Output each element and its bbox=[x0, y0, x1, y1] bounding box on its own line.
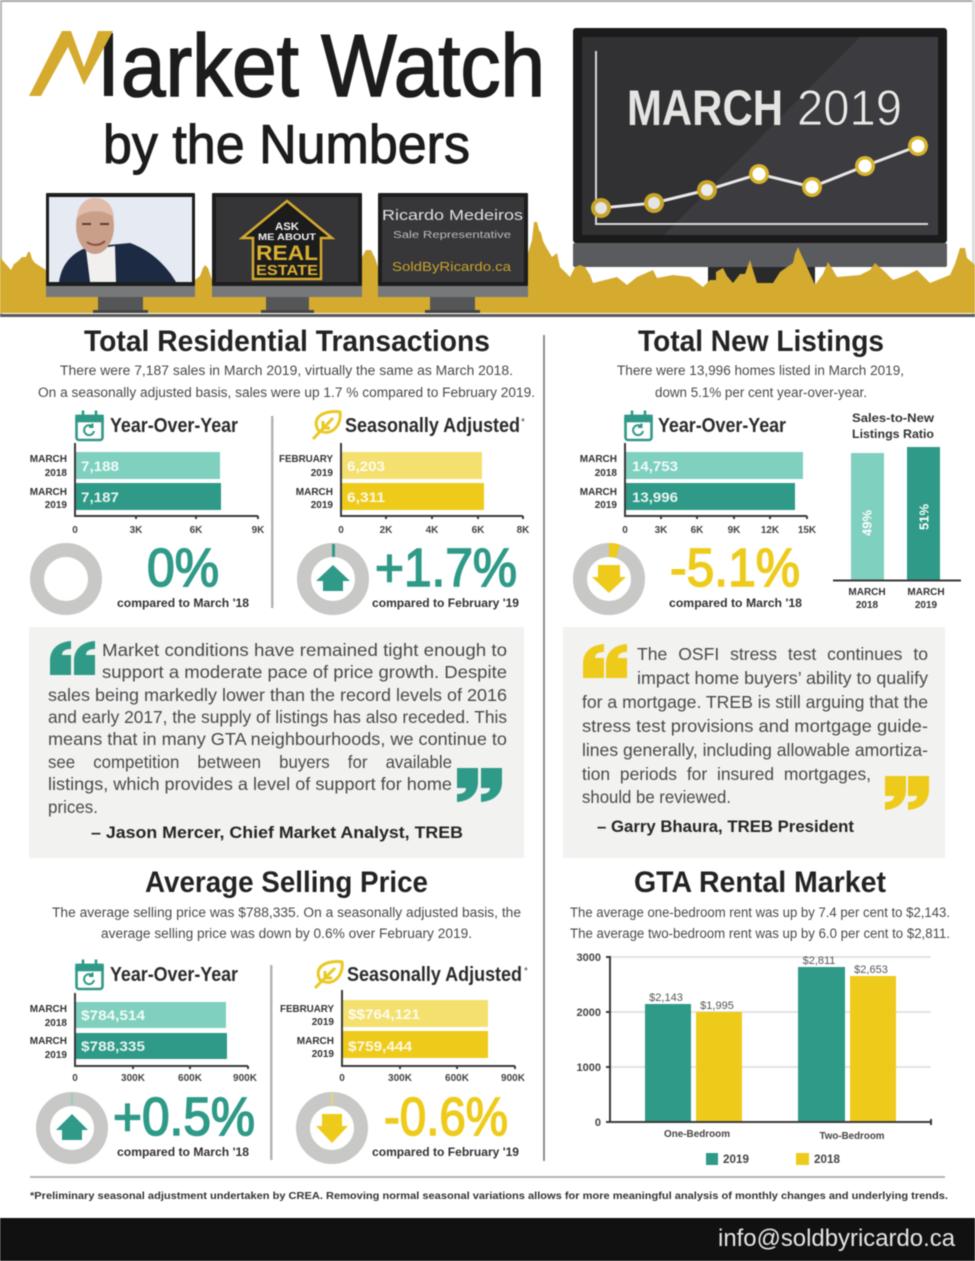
heading: GTA rental market: GTA Rental Market bbox=[634, 866, 886, 899]
month label: 2019 bbox=[797, 80, 902, 136]
icon: leaf bbox=[315, 962, 342, 988]
donut: down 5.1 percent bbox=[580, 550, 638, 608]
bar chart: rental market bbox=[577, 952, 931, 1166]
text block: listings summary bbox=[617, 363, 904, 400]
heading: total residential transactions: Total Residential Transactions bbox=[84, 325, 490, 358]
panel: Garry Bhaura quote: stress test provisions and mortgage guide- bbox=[582, 716, 928, 736]
bar chart: price seasonally adjusted: FEBRUARY bbox=[280, 1004, 334, 1015]
legend: 2018 bbox=[814, 1154, 841, 1166]
bar chart: rental market: One-Bedroom bbox=[664, 1128, 730, 1140]
donut: up 1.7 percent bbox=[304, 544, 362, 608]
bar chart: listings year-over-year: 14,753 bbox=[632, 458, 678, 474]
bar chart: sales-to-new listings ratio: Listings Ratio bbox=[852, 427, 934, 441]
bar chart: rental market: $2,811 bbox=[803, 955, 835, 967]
monitor: agent name bbox=[378, 193, 528, 313]
stat: +1.7% compared to February 19: compared to February '19 bbox=[372, 598, 519, 610]
panel: Jason Mercer quote: see competition between buyers for available bbox=[48, 752, 452, 772]
heading with icon: year-over-year (transactions): Year-Over-Year bbox=[110, 415, 238, 437]
text block: listings summary: There were 13,996 homes listed in March 2019, bbox=[617, 363, 904, 378]
heading with icon: seasonally adjusted (transactions): Seasonally Adjusted bbox=[345, 415, 520, 437]
bar chart: sales-to-new listings ratio: 49% bbox=[860, 510, 874, 536]
bar chart: transactions seasonally adjusted: MARCH bbox=[296, 487, 333, 498]
bar chart: transactions year-over-year: 3K bbox=[130, 525, 143, 536]
heading with icon: seasonally adjusted (transactions): * bbox=[521, 417, 525, 428]
bar chart: transactions year-over-year: MARCH bbox=[30, 454, 67, 465]
title: arket Watch bbox=[121, 16, 545, 115]
stat: -0.6% compared to February 19: compared to February '19 bbox=[372, 1147, 519, 1159]
stat: +0.5% compared to March 18: +0.5% bbox=[113, 1087, 255, 1147]
footer: info@soldbyricardo.ca bbox=[718, 1225, 956, 1252]
heading with icon: year-over-year (transactions) bbox=[76, 410, 238, 440]
icon: calendar bbox=[626, 410, 652, 440]
footer bbox=[0, 1218, 975, 1261]
text block: price summary: The average selling price was $788,335. On a seasonally adjusted basis, the bbox=[52, 905, 521, 920]
text block: price summary bbox=[52, 905, 521, 941]
heading with icon: seasonally adjusted (price): Seasonally Adjusted bbox=[347, 964, 522, 986]
bar chart: price year-over-year: 0 bbox=[72, 1073, 78, 1084]
donut: down 0.6 percent bbox=[303, 1093, 361, 1157]
icon: calendar bbox=[76, 960, 102, 989]
bar chart: listings year-over-year: 2019 bbox=[595, 500, 617, 511]
bar chart: sales-to-new listings ratio: 51% bbox=[916, 504, 932, 530]
bar chart: transactions seasonally adjusted: 6,203 bbox=[347, 458, 385, 474]
stat: 0% compared to March 18 bbox=[117, 538, 250, 610]
bar chart: transactions seasonally adjusted: 6K bbox=[472, 525, 485, 536]
bar chart: rental market: $2,143 bbox=[649, 992, 683, 1004]
stat: +1.7% compared to February 19: +1.7% bbox=[375, 538, 517, 598]
bar chart: price seasonally adjusted: MARCH bbox=[297, 1036, 334, 1047]
text block: rental summary bbox=[570, 905, 950, 941]
bar chart: transactions year-over-year: MARCH bbox=[30, 487, 67, 498]
bar chart: rental market: Two-Bedroom bbox=[820, 1130, 884, 1142]
title: by the Numbers bbox=[103, 113, 470, 175]
month label bbox=[627, 80, 902, 136]
bar chart: transactions year-over-year: 9K bbox=[252, 525, 265, 536]
bar chart: price year-over-year: MARCH bbox=[30, 1004, 67, 1015]
bar chart: price seasonally adjusted: 600K bbox=[445, 1073, 470, 1084]
heading with icon: year-over-year (price) bbox=[76, 960, 238, 989]
panel: Jason Mercer quote: Market conditions have remained tight enough to bbox=[102, 640, 507, 660]
monitor: ask me about real estate bbox=[212, 193, 362, 313]
bar chart: transactions seasonally adjusted: 6,311 bbox=[347, 489, 385, 505]
bar chart: price seasonally adjusted: 2019 bbox=[312, 1017, 334, 1028]
bar chart: price seasonally adjusted: 900K bbox=[501, 1073, 526, 1084]
bar chart: price year-over-year: 900K bbox=[233, 1073, 258, 1084]
bar chart: sales-to-new listings ratio bbox=[833, 411, 961, 611]
panel: Jason Mercer quote: means that in many GTA neighbourhoods, we continue to bbox=[48, 729, 507, 749]
icon: closing quote bbox=[885, 776, 929, 810]
month label: MARCH bbox=[627, 80, 783, 136]
bar chart: listings year-over-year: 13,996 bbox=[632, 489, 678, 505]
text block: transactions summary: There were 7,187 sales in March 2019, virtually the same as March 2018. bbox=[60, 363, 513, 378]
bar chart: transactions year-over-year: 2019 bbox=[45, 500, 67, 511]
bar chart: listings year-over-year: 12K bbox=[761, 525, 780, 536]
panel: Jason Mercer quote: – Jason Mercer, Chief Market Analyst, TREB bbox=[91, 823, 463, 842]
text block: transactions summary: On a seasonally adjusted basis, sales were up 1.7 % compared to February 2019. bbox=[38, 385, 535, 400]
monitor: March 2019 line chart bbox=[573, 28, 947, 288]
heading with icon: year-over-year (listings): Year-Over-Year bbox=[658, 415, 786, 437]
icon: calendar bbox=[76, 410, 102, 440]
panel: Jason Mercer quote: prices. bbox=[48, 797, 98, 817]
bar chart: price year-over-year: MARCH bbox=[30, 1036, 67, 1047]
icon: opening quote bbox=[50, 641, 95, 675]
heading with icon: seasonally adjusted (price) bbox=[315, 962, 528, 988]
bar chart: sales-to-new listings ratio: 2019 bbox=[915, 600, 938, 611]
bar chart: listings year-over-year: MARCH bbox=[580, 454, 617, 465]
bar chart: sales-to-new listings ratio: Sales-to-New bbox=[852, 411, 935, 425]
bar chart: price seasonally adjusted bbox=[280, 990, 526, 1084]
bar chart: sales-to-new listings ratio: MARCH bbox=[848, 587, 886, 598]
panel: Garry Bhaura quote: tion periods for insured mortgages, bbox=[582, 764, 871, 784]
panel: Jason Mercer quote bbox=[29, 627, 524, 858]
panel: Garry Bhaura quote: for a mortgage. TREB is still arguing that the bbox=[582, 692, 928, 712]
bar chart: listings year-over-year bbox=[580, 443, 817, 536]
bar chart: rental market: 1000 bbox=[577, 1062, 601, 1074]
panel: Garry Bhaura quote: should be reviewed. bbox=[582, 787, 731, 807]
icon: leaf bbox=[313, 412, 340, 439]
bar chart: transactions seasonally adjusted: FEBRUARY bbox=[279, 454, 333, 465]
panel: Jason Mercer quote: sales being markedly lower than the record levels of 2016 bbox=[48, 685, 507, 705]
bar chart: transactions seasonally adjusted: 2K bbox=[380, 525, 393, 536]
banner: gold skyline bbox=[0, 222, 975, 317]
icon: house logo: ME ABOUT bbox=[258, 232, 317, 242]
title bbox=[29, 16, 545, 175]
icon: house logo: ESTATE bbox=[256, 262, 318, 279]
heading with icon: year-over-year (listings) bbox=[626, 410, 786, 440]
bar chart: rental market: 2000 bbox=[577, 1007, 601, 1019]
bar chart: transactions year-over-year: 7,188 bbox=[81, 458, 119, 474]
bar chart: listings year-over-year: 2018 bbox=[595, 468, 617, 479]
bar chart: price seasonally adjusted: $759,444 bbox=[348, 1038, 412, 1054]
bar chart: transactions year-over-year bbox=[30, 443, 265, 536]
bar chart: price year-over-year: 600K bbox=[178, 1073, 203, 1084]
bar chart: sales-to-new listings ratio: MARCH bbox=[907, 587, 945, 598]
panel: Garry Bhaura quote: impact home buyers’ ability to qualify bbox=[637, 668, 928, 688]
bar chart: price seasonally adjusted: 2019 bbox=[312, 1049, 334, 1060]
legend: 2019 bbox=[723, 1154, 749, 1166]
bar chart: transactions year-over-year: 7,187 bbox=[81, 489, 119, 505]
text block: transactions summary bbox=[38, 363, 535, 400]
stat: 0% compared to March 18: compared to March '18 bbox=[117, 598, 250, 610]
monitor: agent name: Sale Representative bbox=[393, 230, 512, 241]
bar chart: price year-over-year: 300K bbox=[121, 1073, 146, 1084]
bar chart: sales-to-new listings ratio: 2018 bbox=[856, 600, 879, 611]
icon: closing quote bbox=[457, 768, 502, 802]
bar chart: rental market: 3000 bbox=[577, 952, 601, 964]
footnote: *Preliminary seasonal adjustment undertaken by CREA. Removing normal seasonal variations allows for more meaningful analysis of monthly changes and underlying trends. bbox=[30, 1190, 948, 1202]
icon: house logo bbox=[242, 201, 332, 279]
stat: -0.6% compared to February 19: -0.6% bbox=[384, 1087, 508, 1147]
stat: +0.5% compared to March 18: compared to March '18 bbox=[117, 1147, 250, 1159]
bar chart: listings year-over-year: 6K bbox=[691, 525, 704, 536]
bar chart: price year-over-year: 2018 bbox=[45, 1018, 67, 1029]
monitor: agent name: SoldByRicardo.ca bbox=[392, 259, 512, 274]
stat: -5.1% compared to March 18: -5.1% bbox=[670, 538, 800, 598]
bar chart: listings year-over-year: 0 bbox=[622, 525, 628, 536]
donut: 0 percent bbox=[37, 550, 95, 608]
text block: price summary: average selling price was down by 0.6% over February 2019. bbox=[101, 926, 472, 941]
icon: house logo: ASK bbox=[275, 221, 299, 233]
bar chart: price year-over-year: $784,514 bbox=[81, 1007, 145, 1023]
line series bbox=[591, 136, 928, 218]
bar chart: price year-over-year: $788,335 bbox=[81, 1038, 145, 1054]
bar chart: price seasonally adjusted: 300K bbox=[388, 1073, 413, 1084]
text block: listings summary: down 5.1% per cent year-over-year. bbox=[655, 385, 867, 400]
bar chart: rental market: 0 bbox=[595, 1117, 601, 1129]
bar chart: listings year-over-year: MARCH bbox=[580, 487, 617, 498]
bar chart: price year-over-year bbox=[30, 993, 258, 1084]
text block: rental summary: The average two-bedroom rent was up by 6.0 per cent to $2,811. bbox=[570, 926, 950, 941]
stat: -5.1% compared to March 18: compared to March '18 bbox=[669, 598, 803, 610]
icon: opening quote bbox=[583, 644, 627, 678]
monitor: agent photo bbox=[46, 193, 195, 313]
bar chart: rental market: $1,995 bbox=[700, 1000, 734, 1012]
bar chart: listings year-over-year: 9K bbox=[728, 525, 741, 536]
panel: Garry Bhaura quote: The OSFI stress test continues to bbox=[637, 644, 928, 664]
bar chart: transactions year-over-year: 6K bbox=[190, 525, 203, 536]
panel: Jason Mercer quote: support a moderate pace of price growth. Despite bbox=[102, 662, 507, 682]
bar chart: rental market: $2,653 bbox=[854, 964, 888, 976]
heading with icon: seasonally adjusted (price): * bbox=[524, 966, 528, 977]
text block: rental summary: The average one-bedroom rent was up by 7.4 per cent to $2,143. bbox=[570, 905, 950, 920]
heading: total new listings: Total New Listings bbox=[638, 325, 884, 358]
panel: Garry Bhaura quote: – Garry Bhaura, TREB President bbox=[597, 817, 854, 836]
stat: 0% compared to March 18: 0% bbox=[147, 538, 219, 598]
heading with icon: seasonally adjusted (transactions) bbox=[313, 412, 525, 439]
bar chart: listings year-over-year: 15K bbox=[798, 525, 817, 536]
bar chart: transactions seasonally adjusted: 0 bbox=[338, 525, 344, 536]
bar chart: price seasonally adjusted: 0 bbox=[339, 1073, 345, 1084]
bar chart: transactions seasonally adjusted: 2019 bbox=[311, 500, 333, 511]
bar chart: listings year-over-year: 3K bbox=[655, 525, 668, 536]
monitor: agent name: Ricardo Medeiros bbox=[382, 207, 523, 224]
panel: Jason Mercer quote: and early 2017, the supply of listings has also receded. This bbox=[48, 707, 507, 727]
legend bbox=[706, 1153, 841, 1166]
donut: up 0.5 percent bbox=[43, 1093, 101, 1157]
panel: Garry Bhaura quote bbox=[563, 627, 945, 858]
heading with icon: year-over-year (price): Year-Over-Year bbox=[110, 964, 238, 986]
bar chart: transactions year-over-year: 2018 bbox=[45, 468, 67, 479]
bar chart: transactions seasonally adjusted: 4K bbox=[426, 525, 439, 536]
panel: Jason Mercer quote: listings, which provides a level of support for home bbox=[48, 774, 452, 794]
bar chart: transactions seasonally adjusted: 8K bbox=[517, 525, 530, 536]
panel: Garry Bhaura quote: lines generally, including allowable amortiza- bbox=[582, 740, 928, 760]
bar chart: transactions seasonally adjusted: 2019 bbox=[311, 468, 333, 479]
icon: house logo: REAL bbox=[256, 242, 318, 265]
bar chart: price seasonally adjusted: $$764,121 bbox=[348, 1006, 420, 1022]
bar chart: price year-over-year: 2019 bbox=[45, 1050, 67, 1061]
bar chart: transactions year-over-year: 0 bbox=[72, 525, 78, 536]
bar chart: transactions seasonally adjusted bbox=[279, 443, 530, 536]
heading: average selling price: Average Selling Price bbox=[145, 866, 428, 899]
